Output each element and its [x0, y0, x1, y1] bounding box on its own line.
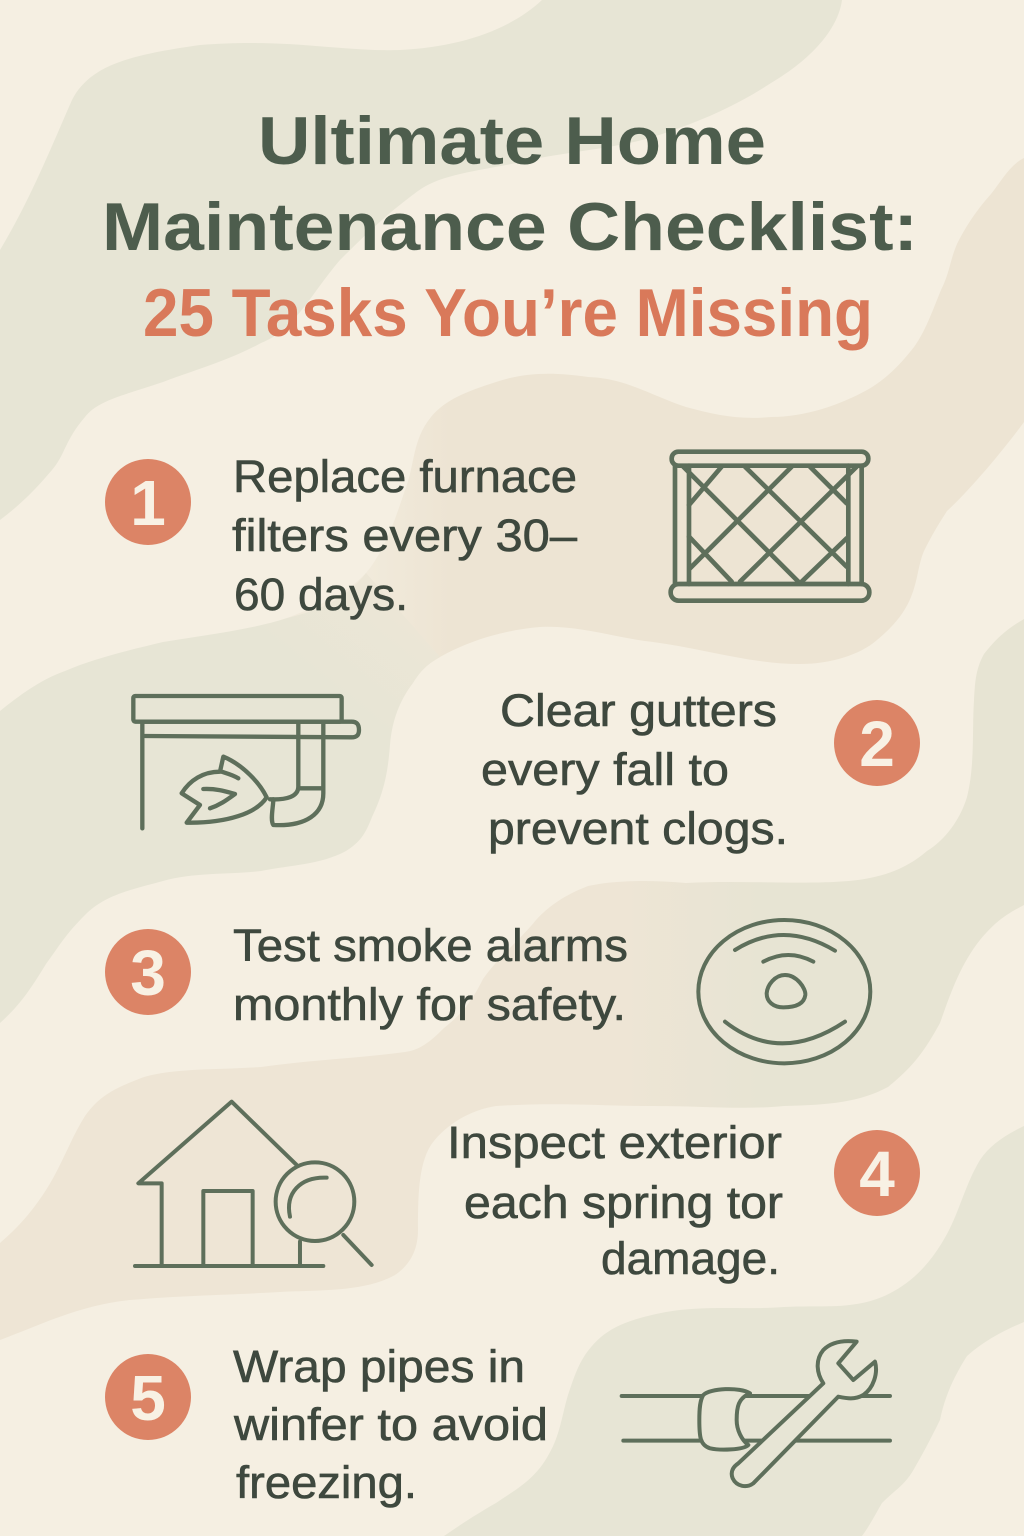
background wave: middle tan to sage band: [0, 619, 1024, 1340]
icon: smoke alarm: [698, 920, 870, 1063]
text: task 1: [232, 451, 577, 620]
text: task 1: Replace furnace: [233, 451, 577, 502]
number badge 3: [105, 929, 191, 1015]
number badge 4: [834, 1130, 920, 1216]
text: task 5: Wrap pipes in: [233, 1341, 525, 1392]
text: task 4: each spring tor: [464, 1177, 783, 1228]
task 4: [135, 1102, 920, 1284]
text: task 4: Inspect exterior: [447, 1117, 782, 1168]
background wave: bottom sage: [444, 1126, 1024, 1536]
number badge 5: [105, 1354, 191, 1440]
text: task 3: monthly for safety.: [233, 979, 626, 1030]
number badge 3: 3: [130, 937, 166, 1009]
text: task 5: winfer to avoid: [233, 1399, 548, 1450]
text: task 2: [481, 685, 788, 854]
number badge 4: 4: [859, 1138, 895, 1210]
text: task 2: prevent clogs.: [488, 803, 788, 854]
task 2: [133, 685, 920, 854]
number badge 2: [834, 700, 920, 786]
icon: pipe and wrench: [622, 1341, 890, 1486]
background wave: left sage: [0, 573, 440, 1023]
text: task 2: Clear gutters: [500, 685, 777, 736]
icon: house with magnifying glass: [135, 1102, 372, 1266]
title: Ultimate Home: [258, 103, 766, 179]
background wave: top sage: [0, 0, 842, 520]
number badge 1: 1: [130, 467, 166, 539]
title: 25 Tasks You’re Missing: [143, 275, 873, 351]
title: [102, 103, 918, 351]
number badge 5: 5: [130, 1362, 166, 1434]
text: task 3: Test smoke alarms: [233, 920, 628, 971]
title: Maintenance Checklist:: [102, 189, 918, 265]
task 5: [105, 1341, 890, 1508]
task 1: [105, 451, 869, 620]
icon: gutter with leaf: [133, 696, 359, 828]
number badge 1: [105, 459, 191, 545]
text: task 1: filters every 30–: [232, 510, 577, 561]
text: task 4: damage.: [601, 1233, 780, 1284]
text: task 2: every fall to: [481, 744, 729, 795]
text: task 5: [233, 1341, 548, 1508]
task 3: [105, 920, 870, 1063]
text: task 3: [233, 920, 628, 1030]
number badge 2: 2: [859, 708, 895, 780]
text: task 5: freezing.: [236, 1457, 417, 1508]
text: task 1: 60 days.: [234, 569, 408, 620]
background wave: upper tan: [287, 158, 1024, 706]
text: task 4: [447, 1117, 783, 1284]
icon: furnace filter: [671, 452, 869, 601]
